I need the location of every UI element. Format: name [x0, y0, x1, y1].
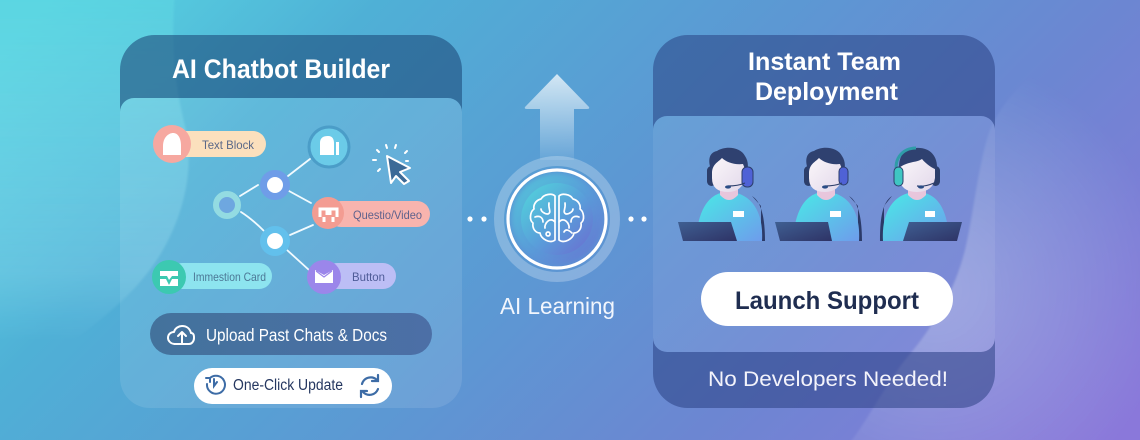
button: One-Click Update	[194, 368, 392, 404]
arrow: upward	[525, 74, 589, 160]
node: Text Block: Text Block	[202, 138, 255, 152]
node: lower junction	[260, 226, 290, 256]
heading: Instant Team Deployment: Deployment	[755, 78, 899, 106]
node: upper junction	[260, 170, 290, 200]
heading: AI Chatbot Builder: AI Chatbot Builder	[172, 54, 390, 84]
label: AI Learning: AI Learning	[500, 293, 615, 319]
icon: refresh	[361, 375, 378, 397]
agent 1	[678, 148, 765, 241]
agent 3	[880, 148, 962, 241]
icon: cursor with sparkles	[373, 145, 410, 184]
button: One-Click Update: One-Click Update	[233, 377, 343, 394]
flow connector lines	[240, 159, 313, 270]
node: Immestion Card: Immestion Card	[193, 270, 266, 284]
node: left root	[216, 194, 238, 216]
connector dots: left	[467, 216, 487, 222]
AI Learning brain badge	[499, 161, 615, 277]
text: No Developers Needed!: No Developers Needed!	[708, 368, 948, 391]
node: Button: Button	[352, 270, 385, 284]
panel body	[653, 116, 995, 352]
node: Question/Video: Questio/Video	[353, 208, 422, 222]
icon: timer	[206, 376, 225, 394]
heading: Instant Team Deployment	[748, 48, 901, 106]
icon: cloud upload	[168, 326, 194, 344]
button: Upload Past Chats & Docs: Upload Past Chats & Docs	[206, 325, 387, 345]
node: Text Block	[153, 125, 266, 163]
node: Button	[307, 260, 396, 294]
button: Upload Past Chats & Docs	[150, 313, 432, 355]
connector dots: right	[628, 216, 647, 222]
panel header background	[120, 35, 462, 112]
node: Question/Video	[312, 197, 430, 229]
panel body	[120, 98, 462, 408]
node: Immestion Card	[152, 260, 272, 294]
button: Launch Support	[701, 272, 953, 326]
panel: AI Chatbot Builder	[120, 35, 462, 408]
button: Launch Support: Launch Support	[735, 287, 920, 315]
panel frame	[653, 35, 995, 408]
panel: Instant Team Deployment	[653, 35, 995, 408]
node: top circle	[309, 127, 349, 167]
agent 2	[775, 148, 862, 241]
heading: Instant Team Deployment: Instant Team	[748, 48, 901, 76]
icon: brain	[530, 194, 584, 241]
